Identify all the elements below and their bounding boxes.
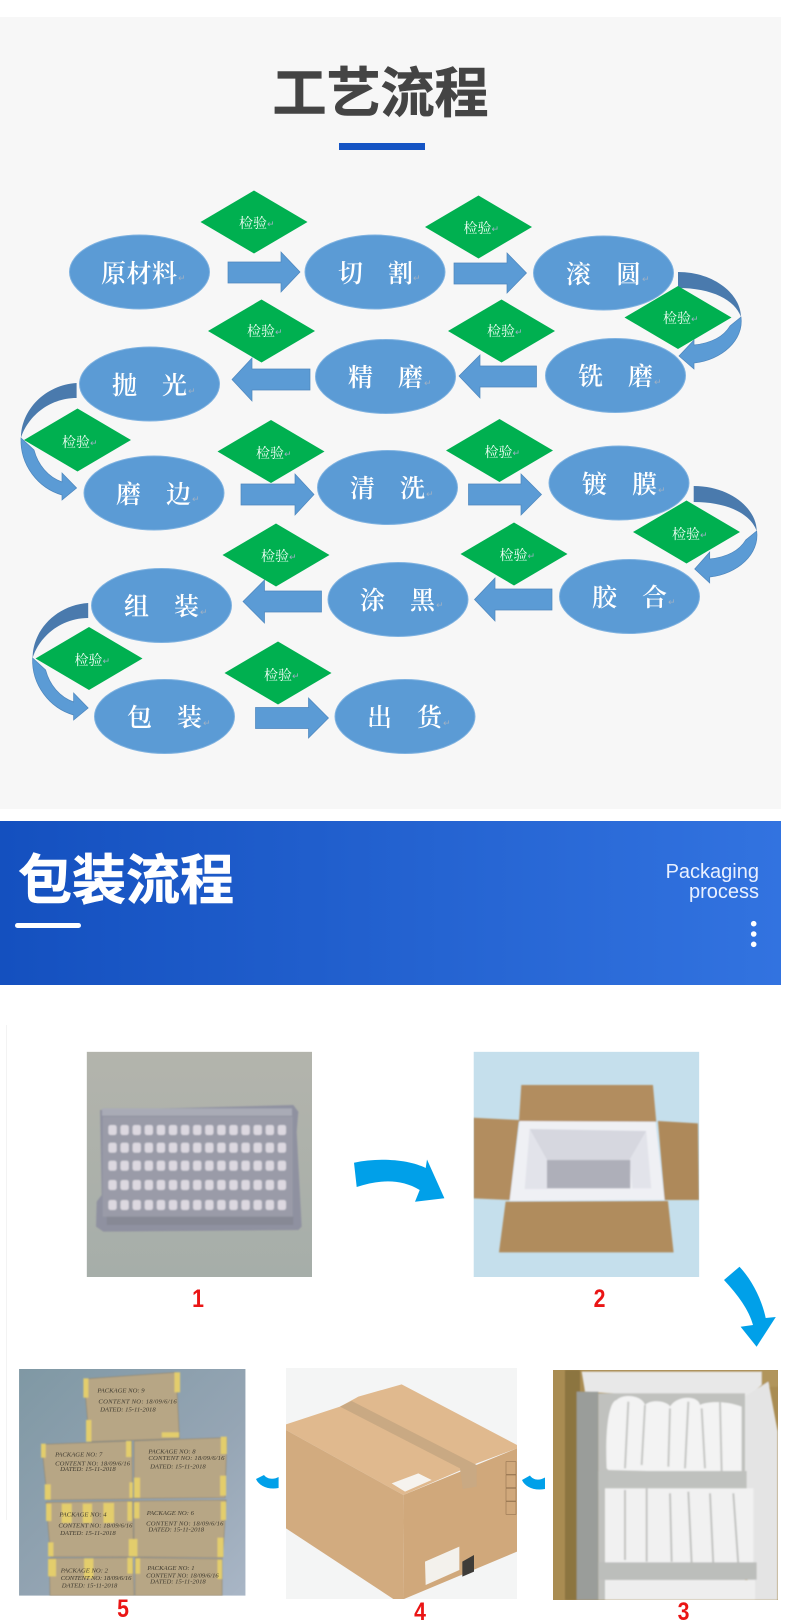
step: 镀膜: ↵ (658, 486, 666, 496)
check diamond 2: 检验 (464, 220, 492, 237)
step: 出货: 出货 (367, 704, 445, 732)
check diamond 3: ↵ (691, 315, 699, 325)
photo 5: stacked labelled boxes: CONTENT NO: 18/09/6/16 (146, 1573, 219, 1580)
step: 精磨: ↵ (424, 379, 432, 389)
check diamond 2: ↵ (492, 225, 499, 235)
step: 磨边: ↵ (192, 495, 200, 505)
check diamond 1: ↵ (267, 220, 275, 230)
step: 出货: ↵ (443, 719, 451, 729)
step: 磨边 (84, 456, 224, 530)
step: 清洗: ↵ (426, 490, 434, 500)
step: 组装 (92, 568, 232, 642)
step: 胶合 (560, 560, 700, 634)
step: 原材料: 原材料 (101, 260, 177, 288)
photo 5: stacked labelled boxes: DATED: 15-11-2018 (149, 1578, 206, 1585)
curved arrow: photo 2 to photo 3 (724, 1267, 776, 1347)
curved arrow: photo 1 to photo 2 (354, 1160, 444, 1202)
banner underline (15, 923, 81, 928)
check diamond 4: ↵ (515, 328, 523, 338)
arrow: 涂黑 to 组装 (243, 580, 322, 623)
check diamond 9 (633, 500, 740, 564)
check diamond 1: 检验 (239, 215, 267, 232)
photo 5: stacked labelled boxes: PACKAGE NO: 4 (58, 1512, 107, 1519)
step: 原材料: ↵ (178, 274, 186, 284)
step: 镀膜 (549, 446, 689, 520)
step: 胶合: ↵ (668, 598, 676, 608)
arrow: 胶合 to 涂黑 (474, 578, 552, 621)
photo 2: open carton with foam (474, 1052, 700, 1277)
arrow: 磨边 to 清洗 (241, 474, 314, 515)
photo 5: stacked labelled boxes: DATED: 15-11-2018 (61, 1583, 118, 1590)
curved arrow: 抛光 to 磨边 (21, 383, 77, 500)
step: 组装: ↵ (200, 608, 208, 618)
photo 5: stacked labelled boxes: PACKAGE NO: 2 (60, 1567, 109, 1574)
check diamond 5 (208, 300, 315, 362)
step: 抛光 (80, 347, 220, 421)
check diamond 10: ↵ (528, 552, 535, 562)
step: 清洗 (318, 450, 458, 524)
photo 5: stacked labelled boxes: DATED: 15-11-2018 (59, 1530, 116, 1537)
check diamond 9: 检验 (672, 526, 700, 543)
photo 3: wrapped items in foam (553, 1370, 778, 1600)
curved arrow: 镀膜 to 胶合 (694, 486, 757, 583)
check diamond 8: 检验 (484, 444, 512, 461)
check diamond 11: 检验 (261, 548, 289, 565)
check diamond 13: ↵ (292, 672, 300, 682)
step: 铣磨: 铣磨 (578, 363, 653, 391)
check diamond 5: 检验 (247, 323, 275, 340)
step: 磨边: 磨边 (116, 481, 191, 509)
check diamond 12: 检验 (74, 652, 102, 669)
step: 精磨: 精磨 (348, 364, 423, 392)
check diamond 12: ↵ (102, 657, 110, 667)
check diamond 5: ↵ (275, 328, 283, 338)
step: 涂黑 (328, 562, 468, 636)
photo 5: stacked labelled boxes: CONTENT NO: 18/09/6/16 (148, 1455, 225, 1462)
step: 滚圆: ↵ (642, 275, 650, 285)
title underline (339, 143, 425, 150)
step: 原材料 (70, 235, 210, 309)
step: 切割: 切割 (338, 260, 413, 288)
arrow: 包装 to 出货 (256, 698, 328, 738)
check diamond 12 (36, 627, 142, 690)
photo 4: sealed carton (286, 1368, 517, 1599)
step: 抛光: ↵ (188, 387, 196, 397)
arrow: 精磨 to 抛光 (232, 358, 310, 401)
check diamond 11 (222, 524, 330, 586)
title: process flow: 工艺流程 (272, 64, 488, 124)
step: 切割: ↵ (413, 274, 421, 284)
photo 5: stacked labelled boxes: DATED: 15-11-2018 (99, 1407, 156, 1414)
arrow: 切割 to 滚圆 (454, 253, 526, 293)
arrow: 铣磨 to 精磨 (459, 355, 536, 398)
step: 包装 (94, 680, 234, 754)
check diamond 9: ↵ (700, 531, 708, 541)
photo 5: stacked labelled boxes: DATED: 15-11-2018 (147, 1527, 205, 1534)
photo 5: stacked labelled boxes: PACKAGE NO: 1 (146, 1565, 195, 1572)
check diamond 3 (624, 286, 732, 349)
check diamond 7: ↵ (284, 450, 292, 460)
check diamond 3: 检验 (663, 310, 691, 327)
label 2: 2 (594, 1284, 605, 1312)
step: 包装: 包装 (127, 704, 202, 732)
arrow: 清洗 to 镀膜 (468, 474, 542, 515)
check diamond 7: 检验 (256, 445, 284, 462)
step: 胶合: 胶合 (592, 584, 667, 612)
check diamond 13: 检验 (264, 667, 292, 684)
step: 清洗: 清洗 (350, 475, 425, 503)
check diamond 10 (460, 522, 568, 586)
check diamond 13 (224, 642, 332, 704)
check diamond 6: 检验 (62, 434, 90, 451)
step: 包装: ↵ (203, 719, 211, 729)
banner title: 包装流程 (18, 851, 234, 911)
curved arrow: 组装 to 包装 (33, 603, 88, 720)
photo 1: plastic tray (86, 1052, 312, 1277)
photo 5: stacked labelled boxes: CONTENT NO: 18/09/6/16 (146, 1521, 224, 1528)
banner dots (751, 921, 756, 947)
check diamond 6 (24, 408, 131, 472)
step: 切割 (305, 235, 445, 309)
photo 5: stacked labelled boxes: PACKAGE NO: 7 (54, 1452, 103, 1459)
photo 5: stacked labelled boxes: CONTENT NO: 18/09/6/16 (55, 1461, 131, 1468)
check diamond 4 (448, 300, 555, 362)
photo 5: stacked labelled boxes: CONTENT NO: 18/09/6/16 (58, 1523, 133, 1530)
step: 铣磨: ↵ (654, 378, 662, 388)
banner subtitle: process (689, 881, 759, 903)
small arrow: photo 3 to photo 4 (522, 1476, 545, 1490)
photo 5: stacked labelled boxes (19, 1369, 246, 1596)
step: 铣磨 (546, 338, 686, 412)
curved arrow: 滚圆 to 铣磨 (678, 272, 741, 369)
photo 5: stacked labelled boxes: CONTENT NO: 18/09/6/16 (61, 1575, 132, 1582)
small arrow: photo 4 to photo 5 (256, 1475, 279, 1489)
photo 5: stacked labelled boxes: CONTENT NO: 18/09/6/16 (98, 1399, 177, 1406)
step: 精磨 (316, 340, 456, 414)
step: 滚圆: 滚圆 (566, 261, 641, 289)
step: 抛光: 抛光 (112, 372, 187, 400)
check diamond 6: ↵ (90, 439, 98, 449)
check diamond 10: 检验 (500, 547, 528, 564)
check diamond 4: 检验 (487, 323, 515, 340)
step: 镀膜: 镀膜 (582, 471, 657, 499)
photo 5: stacked labelled boxes: DATED: 15-11-2018 (59, 1466, 116, 1473)
check diamond 7 (218, 420, 324, 483)
check diamond 11: ↵ (289, 553, 297, 563)
photo 5: stacked labelled boxes: PACKAGE NO: 9 (96, 1387, 145, 1394)
check diamond 1 (200, 190, 308, 254)
step: 涂黑: ↵ (436, 601, 444, 611)
photo 5: stacked labelled boxes: DATED: 15-11-2018 (149, 1463, 206, 1470)
banner: packaging process (0, 821, 781, 985)
step: 组装: 组装 (124, 593, 199, 621)
check diamond 8: ↵ (512, 449, 520, 459)
photo 5: stacked labelled boxes: PACKAGE NO: 6 (146, 1510, 195, 1517)
label 1: 1 (192, 1284, 204, 1312)
photo 5: stacked labelled boxes: PACKAGE NO: 8 (147, 1448, 196, 1455)
check diamond 8 (446, 419, 553, 482)
step: 涂黑: 涂黑 (360, 587, 436, 615)
arrow: 原材料 to 切割 (228, 252, 300, 292)
banner subtitle: Packaging (666, 861, 759, 883)
check diamond 2 (425, 196, 532, 258)
step: 出货 (335, 680, 475, 754)
step: 滚圆 (534, 236, 674, 310)
